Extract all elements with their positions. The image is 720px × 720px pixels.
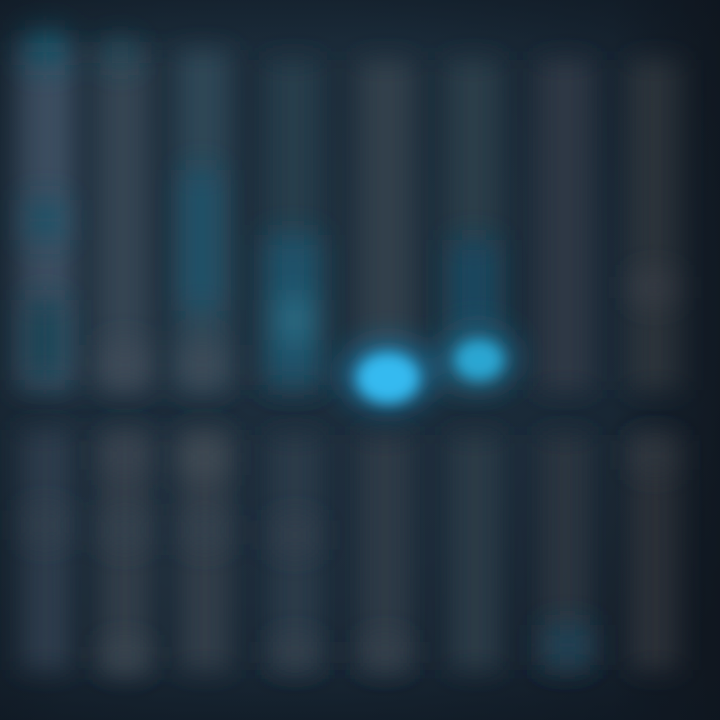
lower columns	[20, 430, 680, 670]
bright blue spot: small	[455, 340, 503, 380]
bright blue spot: large	[357, 353, 419, 403]
glow halo	[342, 328, 517, 409]
upper columns	[16, 50, 682, 390]
